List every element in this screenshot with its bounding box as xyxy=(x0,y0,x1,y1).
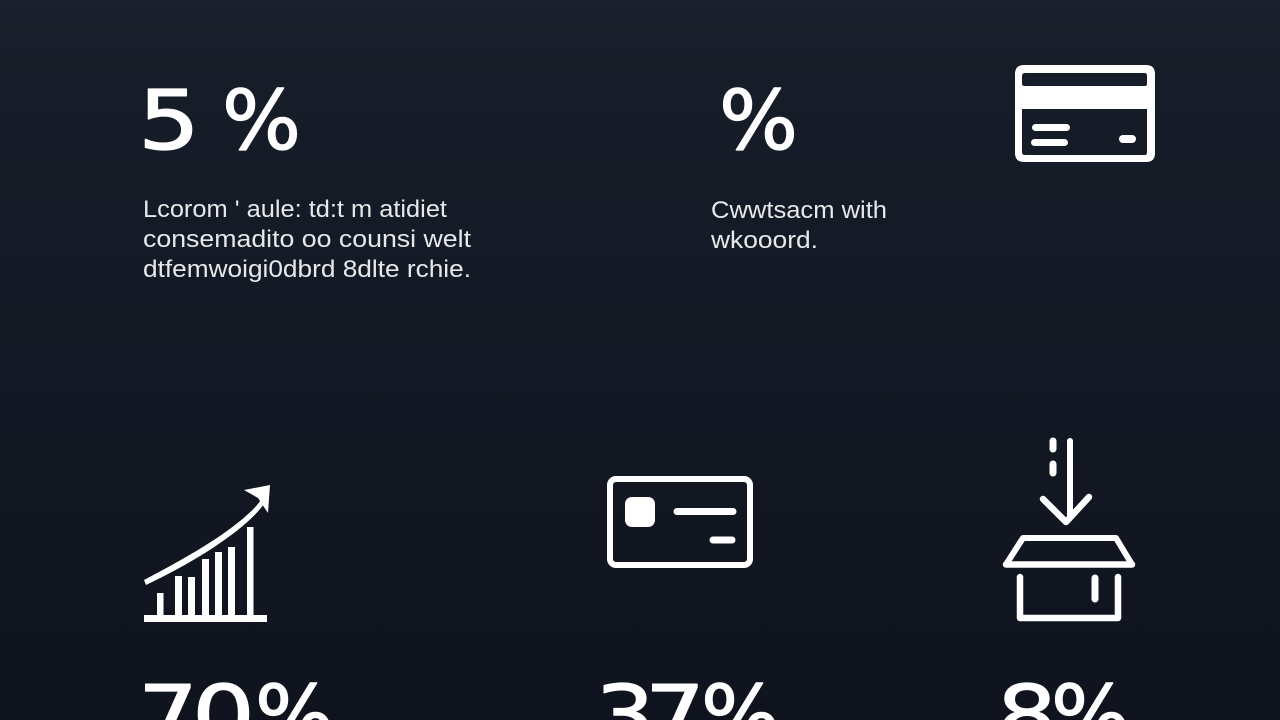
stat: percent sign: % xyxy=(719,74,798,169)
icon: payment card with chip xyxy=(610,479,750,565)
icon: arrow dropping into box xyxy=(1006,441,1132,618)
icon: credit card with stripe xyxy=(1015,65,1155,162)
text block: first description: Lcorom ' aule: td:t m atidiet xyxy=(143,196,447,223)
stat: 5 %: % xyxy=(222,74,301,169)
text block: second description: Cwwtsacm with xyxy=(711,197,887,224)
text block: second description: wkooord. xyxy=(710,227,818,254)
text block: first description xyxy=(143,196,471,283)
icon: growth chart with rising arrow xyxy=(144,485,270,622)
stat: 8% xyxy=(997,669,1130,720)
stat: 37% xyxy=(595,669,780,720)
stat: 5 %: 5 xyxy=(138,74,200,169)
stat: 70% xyxy=(138,669,334,720)
text block: second description xyxy=(710,197,887,254)
stat: 5 % xyxy=(138,74,301,169)
text block: first description: dtfemwoigi0dbrd 8dlte rchie. xyxy=(143,256,471,283)
text block: first description: consemadito oo counsi welt xyxy=(143,226,471,253)
